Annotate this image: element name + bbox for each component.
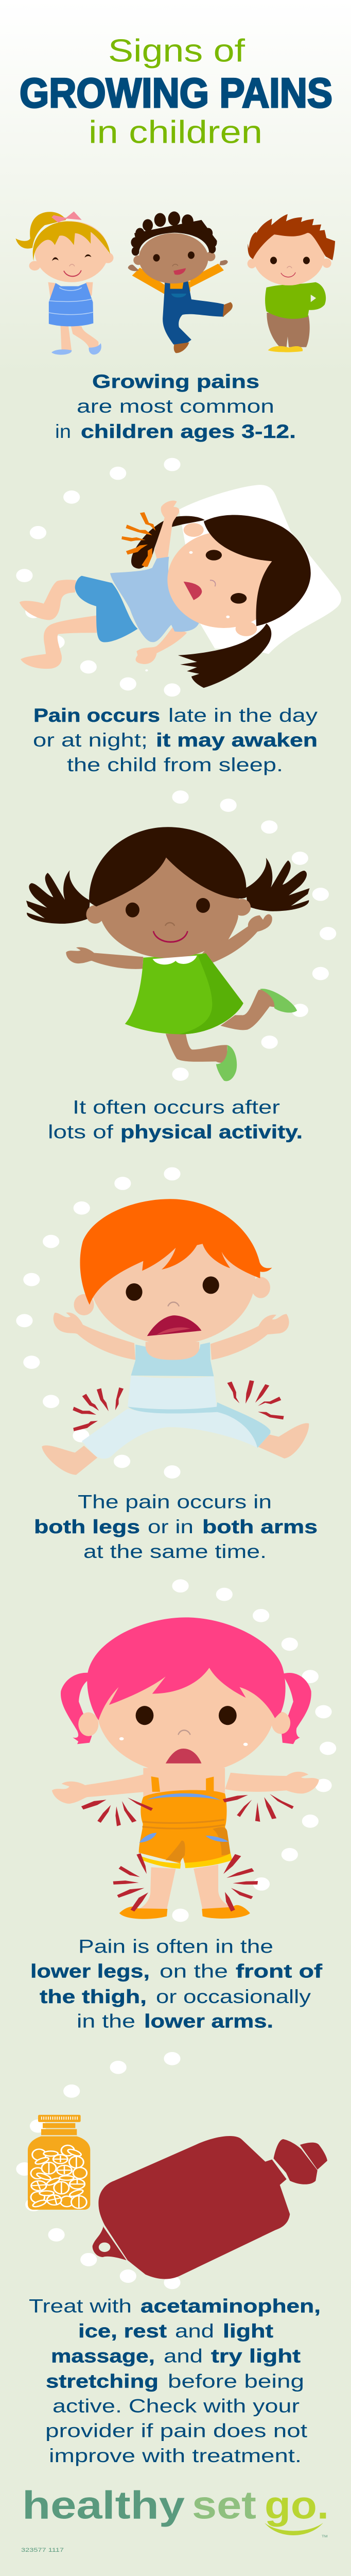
- text: intro: [55, 370, 296, 442]
- text: pain location: or occasionally: [156, 1986, 311, 2007]
- arms and legs: [66, 914, 275, 1063]
- text: pain timing: it may awaken: [156, 729, 318, 751]
- text: treatment: ice, rest: [78, 2320, 167, 2342]
- pain lines: arms and legs: [81, 1794, 294, 1911]
- text: pain location: Pain is often in the: [78, 1936, 273, 1957]
- pain lines: legs: [73, 1380, 284, 1431]
- text: treatment: Treat with: [29, 2295, 132, 2317]
- text: physical activity: [48, 1096, 303, 1143]
- illustration: pink-haired girl with pain: [52, 1617, 319, 1919]
- head: [74, 1199, 272, 1361]
- romper: [82, 1343, 270, 1459]
- text: intro: in: [55, 420, 71, 442]
- text: treatment: active. Check with your: [52, 2395, 300, 2416]
- logo: healthy set go: set: [192, 2484, 256, 2528]
- lower arm and legs: [20, 580, 187, 669]
- illustration: boy with arm and leg pain: [42, 1199, 309, 1475]
- logo: healthy set go: healthy: [22, 2484, 185, 2528]
- arms, torso and legs: [52, 1768, 319, 1910]
- shirt: [110, 557, 199, 642]
- icon: hot water bottle: [93, 2136, 327, 2279]
- text: pain location: in the: [77, 2010, 135, 2031]
- shoes: [216, 989, 297, 1081]
- decorative dots: jumping girl: [43, 852, 336, 1248]
- text: treatment: try light: [211, 2345, 301, 2366]
- text: both legs or arms: both legs: [34, 1516, 140, 1537]
- decorative dots: pink-haired girl: [110, 1670, 336, 2074]
- pillow: [179, 485, 341, 654]
- text: pain location: front of: [236, 1960, 322, 1982]
- text: both legs or arms: [34, 1491, 318, 1562]
- text: pain location: on the: [160, 1960, 228, 1982]
- text: treatment: acetaminophen,: [141, 2295, 321, 2317]
- child: boy in overalls: [128, 211, 233, 353]
- text: both legs or arms: The pain occurs in: [78, 1491, 272, 1512]
- text: pain timing: or at night;: [33, 729, 148, 751]
- text: treatment: [29, 2295, 321, 2466]
- text: pain location: the thigh,: [40, 1986, 147, 2007]
- pills: [31, 2145, 87, 2208]
- logo: healthy set go: [22, 2484, 329, 2538]
- text: treatment: provider if pain does not: [45, 2420, 307, 2442]
- skirt: [75, 576, 137, 642]
- dress: [125, 954, 243, 1034]
- decorative dots: sleeping girl: [16, 458, 277, 834]
- text: both legs or arms: both arms: [202, 1516, 318, 1537]
- shoes: [119, 1905, 250, 1919]
- text: pain timing: Pain occurs: [33, 704, 160, 726]
- decorative dots: orange-haired boy: [16, 1273, 298, 1651]
- decorative dots: treatment: [16, 2084, 181, 2289]
- text: treatment: and: [175, 2320, 214, 2342]
- child: red-haired boy: [248, 214, 335, 352]
- head: [145, 515, 311, 688]
- illustration: jumping girl in green dress: [26, 827, 310, 1081]
- illustration: girl lying on a pillow: [20, 485, 341, 688]
- head: [26, 827, 310, 964]
- title: [20, 32, 332, 150]
- logo: healthy set go: TM: [322, 2534, 328, 2538]
- ponytail and raised arm: [131, 501, 205, 569]
- pain lines: arm: [121, 512, 155, 567]
- text: physical activity: It often occurs after: [73, 1096, 280, 1117]
- text: intro: Growing pains: [92, 370, 259, 392]
- bottle body: [28, 2115, 90, 2210]
- text: treatment: stretching: [46, 2370, 159, 2392]
- job code: 323577 1117: [21, 2547, 64, 2553]
- overalls: [139, 1776, 232, 1869]
- text: treatment: improve with treatment.: [49, 2445, 302, 2466]
- pigtails: [61, 1673, 311, 1744]
- head: [78, 1617, 290, 1774]
- text: treatment: and: [164, 2345, 203, 2366]
- text: physical activity: physical activity.: [120, 1121, 303, 1143]
- text: treatment: light: [223, 2320, 273, 2342]
- child: blonde girl: [15, 211, 114, 355]
- text: both legs or arms: or in: [148, 1516, 194, 1537]
- title: Signs of: [108, 32, 245, 69]
- text: physical activity: lots of: [48, 1121, 113, 1143]
- illustration: three children: [15, 211, 335, 355]
- text: pain timing: the child from sleep.: [67, 754, 283, 775]
- text: intro: children ages 3-12.: [81, 420, 296, 442]
- text: pain location: lower legs,: [30, 1960, 150, 1982]
- text: pain location: lower arms.: [144, 2010, 273, 2031]
- text: pain timing: late in the day: [168, 704, 318, 726]
- text: treatment: massage,: [51, 2345, 155, 2366]
- icon: pill bottle: [28, 2115, 90, 2210]
- text: both legs or arms: at the same time.: [83, 1540, 267, 1562]
- arms and legs: [42, 1312, 309, 1475]
- text: treatment: before being: [168, 2370, 304, 2392]
- logo: healthy set go: go.: [265, 2484, 329, 2528]
- text: intro: are most common: [77, 395, 274, 417]
- text: pain timing: [33, 704, 318, 775]
- title: in children: [89, 114, 262, 150]
- text: pain location: [30, 1936, 322, 2031]
